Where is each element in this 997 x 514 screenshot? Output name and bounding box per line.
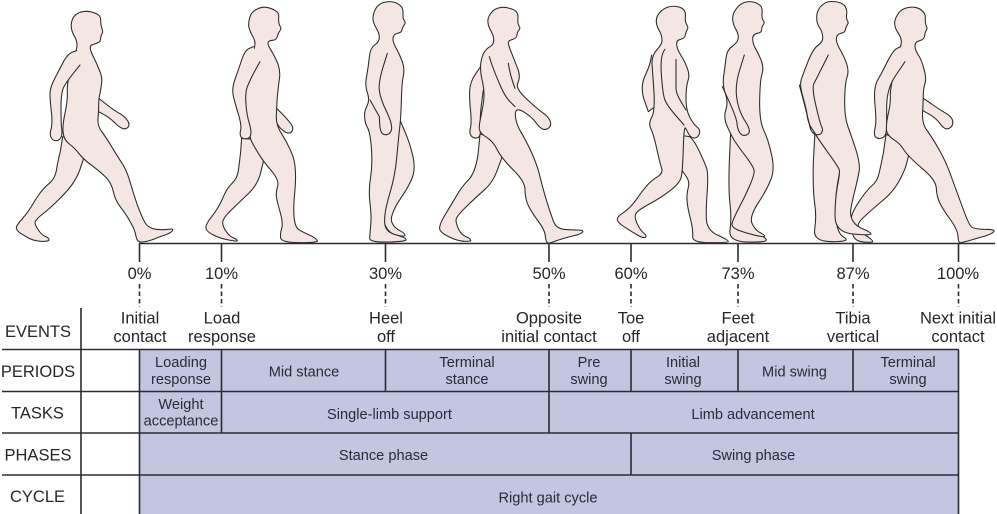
row labels: TASKS bbox=[11, 404, 64, 422]
periods row: swing bbox=[570, 372, 608, 388]
row labels: PERIODS bbox=[1, 363, 75, 381]
phases row: Stance phase bbox=[339, 448, 428, 464]
figure: 50% opposite initial contact bbox=[440, 7, 583, 243]
phases row: Swing phase bbox=[712, 448, 795, 464]
event labels: Opposite bbox=[516, 310, 582, 328]
figure: 0% initial contact bbox=[16, 11, 173, 242]
percentages: 100% bbox=[937, 265, 979, 283]
figure: 10% load response bbox=[206, 7, 317, 243]
percentages: 30% bbox=[369, 265, 402, 283]
event labels: initial contact bbox=[501, 328, 597, 346]
tasks row bbox=[144, 397, 815, 430]
table grid bbox=[2, 308, 959, 514]
periods row bbox=[151, 355, 936, 388]
periods row: swing bbox=[889, 372, 927, 388]
tasks row: Limb advancement bbox=[691, 407, 815, 423]
event labels: Toe bbox=[618, 310, 644, 328]
periods row: Mid stance bbox=[269, 364, 339, 380]
event labels: off bbox=[622, 328, 640, 346]
periods row: Terminal bbox=[880, 355, 936, 371]
event labels: response bbox=[188, 328, 256, 346]
table fill bbox=[140, 350, 958, 514]
event labels: Initial bbox=[121, 310, 159, 328]
tasks row: acceptance bbox=[144, 414, 218, 430]
event labels: Load bbox=[204, 310, 240, 328]
figure: 100% next initial contact bbox=[851, 7, 994, 243]
figure: 60% toe off bbox=[617, 6, 728, 243]
percentages: 60% bbox=[614, 265, 648, 283]
event labels: contact bbox=[931, 328, 985, 346]
percentages: 73% bbox=[721, 265, 755, 283]
phases row bbox=[339, 448, 795, 464]
event labels: off bbox=[377, 328, 395, 346]
periods row: Terminal bbox=[439, 355, 495, 371]
percentages bbox=[128, 265, 979, 283]
cycle row: Right gait cycle bbox=[499, 490, 597, 506]
event labels: Next initial bbox=[920, 310, 996, 328]
percentages: 87% bbox=[836, 265, 870, 283]
event labels: adjacent bbox=[707, 328, 770, 346]
percentages: 10% bbox=[205, 265, 238, 283]
event labels: contact bbox=[113, 328, 167, 346]
figure: 30% heel off bbox=[365, 2, 414, 242]
ground line with ticks bbox=[139, 243, 995, 307]
tasks row: Weight bbox=[158, 397, 204, 413]
periods row: Initial bbox=[666, 355, 700, 371]
event labels: vertical bbox=[827, 328, 879, 346]
event labels: Tibia bbox=[835, 310, 871, 328]
event labels: Heel bbox=[369, 310, 403, 328]
periods row: Pre bbox=[578, 355, 600, 371]
periods row: stance bbox=[446, 372, 488, 388]
row labels: EVENTS bbox=[5, 323, 71, 341]
periods row: Mid swing bbox=[762, 364, 827, 380]
periods row: Loading bbox=[155, 355, 207, 371]
row labels: CYCLE bbox=[10, 488, 65, 506]
row labels bbox=[1, 323, 75, 506]
figure: 87% tibia vertical bbox=[799, 1, 871, 242]
event labels bbox=[113, 310, 996, 346]
percentages: 0% bbox=[128, 265, 152, 283]
percentages: 50% bbox=[532, 265, 566, 283]
figure: 73% feet adjacent bbox=[722, 2, 773, 242]
event labels: Feet bbox=[721, 310, 755, 328]
row labels: PHASES bbox=[5, 446, 71, 464]
tasks row: Single-limb support bbox=[327, 407, 452, 423]
periods row: response bbox=[151, 372, 211, 388]
periods row: swing bbox=[664, 372, 702, 388]
